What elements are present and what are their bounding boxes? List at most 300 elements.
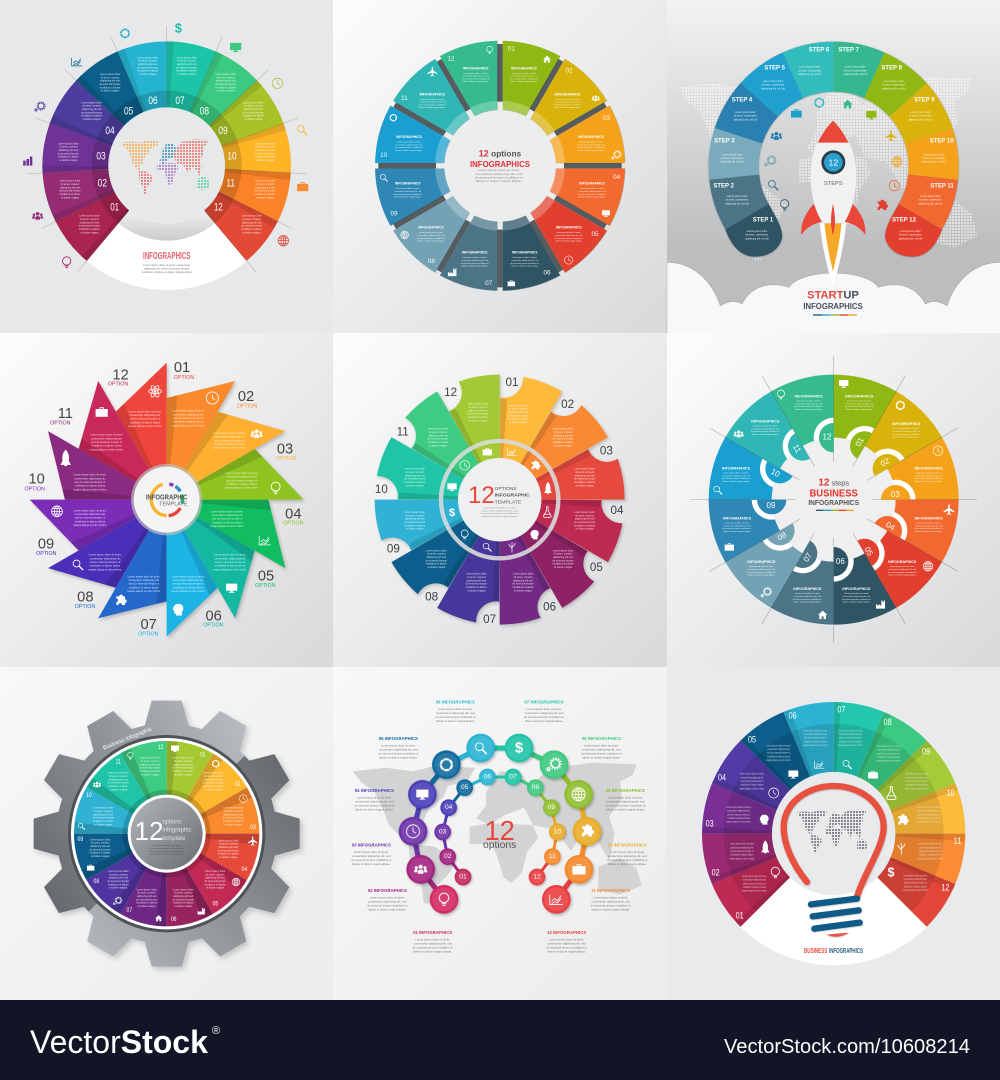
segment numbers: 12 [214, 201, 223, 213]
segment numbers: 05 [590, 561, 603, 574]
blade 05 [132, 500, 269, 618]
segment 07: INFOGRAPHICS [462, 251, 488, 255]
segment 10 [377, 437, 464, 500]
segment 08 [855, 712, 931, 800]
step 3: STEP 3 [714, 139, 735, 145]
segment numbers: 01 [110, 201, 119, 213]
segment 09 [694, 446, 834, 562]
small numbered circles: 08 [532, 784, 539, 791]
segment numbers: 03 [706, 819, 714, 829]
solid world map [353, 763, 642, 905]
numbered half bubbles: 06 [836, 557, 845, 566]
segment 09: INFOGRAPHICS [395, 182, 421, 186]
centre hub with heading [123, 790, 211, 878]
centre disc with heading: 12 [468, 482, 495, 509]
blade numbers and option labels: OPTION [174, 375, 194, 381]
numbers and icons on segments: 07 [485, 280, 493, 287]
step 2 [700, 157, 774, 229]
centre heading: 12 options [479, 148, 522, 158]
segment numbers and icons: 12 [158, 744, 164, 751]
blade numbers and option labels: OPTION [75, 604, 95, 610]
panel: gear wheel, bottom left [0, 667, 333, 1000]
step 8: STEP 8 [881, 65, 903, 71]
centre hub: INFOGRAPHIC [146, 494, 187, 501]
blade numbers and option labels: 06 [206, 608, 222, 624]
blade 11 [64, 381, 201, 500]
segment 05 [802, 500, 942, 616]
segment 07: INFOGRAPHICS [793, 587, 822, 591]
blade 08 [48, 465, 167, 602]
numbered half bubbles: 07 [802, 551, 814, 563]
step 4 [715, 80, 784, 145]
segment 12 [438, 362, 536, 468]
segment 03 [531, 438, 637, 536]
segment 09 [63, 794, 167, 880]
segment 04 [50, 77, 133, 147]
light bulb [784, 786, 884, 937]
segment numbers: 08 [425, 590, 438, 603]
text labels around chains: 06 INFOGRAPHICS [436, 699, 475, 704]
blade 09 [30, 440, 167, 559]
panel: circle with world map, top left [0, 0, 333, 333]
blade 07 [98, 500, 167, 618]
segment numbers and icons: 09 [77, 836, 83, 843]
text labels around chains: 02 INFOGRAPHICS [368, 888, 407, 893]
small numbered circles: 12 [533, 873, 541, 880]
numbers and icons on segments: 02 [565, 67, 573, 74]
segment icons [714, 380, 954, 619]
small numbered circles: 11 [549, 853, 556, 860]
text labels around chains: 11 INFOGRAPHICS [591, 888, 630, 893]
segment 11 [393, 384, 500, 482]
segment numbers: 01 [736, 911, 744, 921]
step 9 [885, 83, 961, 159]
numbers and icons on segments: 11 [401, 95, 408, 102]
centre number: options [483, 840, 516, 851]
numbered half bubbles: 11 [791, 443, 803, 455]
centre disc with heading [458, 458, 541, 541]
segment numbers: 07 [175, 95, 185, 107]
clouds with startup heading [667, 262, 1000, 333]
segment 06 [473, 210, 560, 304]
blade numbers and option labels: OPTION [255, 583, 276, 589]
segment 11 [891, 834, 965, 884]
blade numbers and option labels: 02 [238, 389, 254, 405]
blade numbers and option labels: OPTION [276, 456, 296, 462]
curved gear label: Business infographic [102, 726, 153, 752]
small numbered circles: 09 [548, 804, 555, 811]
centre disc with heading: TEMPLATE [495, 499, 522, 505]
segment numbers: 12 [941, 883, 949, 893]
text labels around chains: 03 INFOGRAPHICS [352, 842, 391, 847]
blade numbers and option labels: 05 [258, 569, 274, 585]
segment 03 [702, 783, 777, 834]
centre heading: 12 steps [818, 477, 849, 488]
panel: twelve separated segments, top centre [333, 0, 667, 333]
segment numbers and icons: 07 [126, 907, 132, 914]
segment numbers [706, 704, 962, 921]
segment 02: INFOGRAPHICS [892, 422, 921, 426]
segments with titles [362, 27, 638, 304]
segment numbers and icons: 08 [93, 878, 99, 885]
numbers and icons on segments: 01 [508, 45, 515, 52]
large icon circles [399, 734, 601, 914]
bulb caption: BUSINESS [804, 948, 828, 955]
blade numbers and option labels: 08 [77, 590, 93, 606]
gear body [34, 701, 300, 967]
step 6: STEP 6 [809, 48, 830, 54]
segment 10 [217, 123, 300, 194]
segment 04 [167, 834, 259, 880]
segment 07 [834, 702, 884, 777]
blade numbers and option labels: 01 [174, 360, 190, 376]
numbered half bubbles: 10 [769, 467, 782, 479]
segment 02 [167, 753, 253, 857]
segment numbers: 01 [506, 376, 518, 389]
segment 06 [127, 834, 213, 937]
segment numbers: 05 [748, 734, 756, 744]
segment 08 [384, 500, 482, 606]
blade icons [52, 384, 280, 616]
rocket [801, 121, 865, 287]
numbered half bubbles: 09 [767, 501, 776, 510]
segment numbers: 07 [483, 613, 496, 626]
segment 02 [527, 59, 614, 153]
small numbered circles: 10 [554, 828, 561, 835]
blade numbers and option labels: OPTION [108, 382, 128, 388]
footer watermark band: VectorStock [30, 1024, 208, 1060]
segment 04 [536, 500, 622, 562]
segment 02 [518, 393, 615, 500]
step 10 [899, 128, 968, 194]
step 2: STEP 2 [713, 184, 735, 190]
segment numbers and icons: 06 [171, 916, 177, 923]
segment numbers: 03 [600, 444, 613, 457]
numbered half bubbles: 05 [863, 545, 875, 558]
step 7 [834, 42, 884, 98]
step 9: STEP 9 [914, 97, 935, 103]
segment 02 [693, 809, 781, 884]
step 12 [885, 204, 942, 257]
segment 10 [375, 106, 450, 163]
segment numbers and icons: 05 [212, 900, 218, 907]
numbers and icons on segments: 04 [613, 174, 621, 181]
segment 04 [550, 168, 625, 226]
small numbered circles: 03 [439, 828, 447, 835]
segment numbers: 06 [543, 600, 556, 613]
blade numbers and option labels: 03 [277, 442, 293, 458]
segment numbers: 07 [837, 704, 845, 714]
segment numbers: 09 [922, 746, 930, 756]
text labels around chains: 07 INFOGRAPHICS [524, 699, 564, 704]
blade numbers and option labels: 12 [113, 367, 129, 383]
segment 01 [167, 741, 213, 834]
segment numbers: 04 [611, 504, 624, 517]
segment numbers [96, 95, 237, 213]
white bottom sector with infographics caption: INFOGRAPHICS [143, 251, 191, 262]
segment 05 [76, 45, 161, 129]
segment numbers: 04 [718, 773, 726, 783]
panel: pinwheel, middle left [0, 333, 333, 667]
step 12: STEP 12 [892, 218, 917, 224]
ring of twelve numbered segments [33, 32, 300, 265]
segment numbers: 06 [789, 711, 797, 721]
segment 05 [500, 518, 606, 615]
segment 04: INFOGRAPHICS [579, 182, 606, 186]
centre heading [470, 148, 530, 183]
segment 12: INFOGRAPHICS [463, 66, 489, 70]
outer icons [23, 21, 308, 268]
segment 04: INFOGRAPHICS [915, 516, 943, 520]
numbered half bubbles [757, 423, 910, 576]
segment 08: INFOGRAPHICS [747, 560, 776, 564]
small numbered circles [434, 769, 566, 885]
centre heading: BUSINESS [809, 488, 858, 499]
step 5: STEP 5 [764, 65, 786, 71]
step 1: STEP 1 [753, 218, 774, 224]
blade numbers and option labels: OPTION [203, 623, 224, 629]
blade 03 [167, 440, 304, 559]
segment 11 [725, 383, 865, 500]
small numbered circles: 05 [461, 784, 469, 791]
segment 09 [362, 139, 455, 226]
rocket: 12 [829, 157, 838, 167]
segment numbers: 06 [148, 95, 158, 107]
segment numbers and icons: 11 [115, 758, 121, 765]
centre hub with heading: infographic [162, 828, 192, 834]
footer watermark band: VectorStock.com/10608214 [724, 1036, 970, 1058]
segment numbers and icons: 04 [241, 866, 247, 873]
segments [693, 693, 975, 931]
step 3 [704, 123, 766, 180]
numbers and icons on segments [380, 45, 621, 287]
centre hub with heading: template [162, 836, 186, 842]
numbered half bubbles: 12 [823, 432, 832, 441]
segment 01 [503, 41, 560, 116]
segment numbers: 03 [96, 150, 106, 162]
segment 06 [780, 500, 896, 639]
segment numbers: 10 [947, 788, 955, 798]
segment 05 [143, 834, 247, 920]
blade 01 [167, 381, 235, 500]
text labels around chains [351, 699, 648, 953]
numbers and icons on segments: 08 [428, 258, 435, 265]
wedge segments [694, 360, 973, 639]
dotted world map [122, 139, 210, 194]
small numbered circles: 07 [509, 773, 517, 780]
segment numbers: 08 [200, 106, 209, 118]
centre disc with heading: INFOGRAPHIC [495, 492, 530, 498]
centre hub with heading: 12 [135, 816, 163, 846]
blade numbers and option labels: 07 [141, 617, 157, 633]
centre disc with heading: OPTIONS [495, 486, 517, 492]
segment 03 [167, 787, 270, 874]
segment 07 [440, 215, 497, 291]
segment 01 [834, 375, 896, 500]
blade 06 [107, 500, 226, 637]
segment numbers: 09 [387, 542, 400, 555]
rocket: STEPS [824, 181, 843, 187]
text labels around chains: 08 INFOGRAPHICS [582, 736, 621, 741]
segment numbers: 11 [226, 177, 235, 189]
segment 04 [712, 737, 800, 812]
segment 02 [834, 391, 950, 531]
segment 01: INFOGRAPHICS [845, 394, 874, 398]
segment 10: INFOGRAPHICS [722, 466, 751, 470]
panel: two chains of circles on world map, bottom centre [333, 667, 667, 1000]
segment 09 [874, 741, 962, 829]
segment 02: INFOGRAPHICS [555, 92, 581, 96]
numbers and icons on segments: 09 [390, 210, 398, 217]
panel: startup rocket arch, top right [667, 0, 1000, 333]
segment numbers: 10 [375, 483, 388, 496]
numbers and icons on segments: 06 [543, 269, 551, 276]
panel: light bulb wheel, bottom right [667, 667, 1000, 1000]
segment 09: INFOGRAPHICS [723, 516, 752, 520]
segment 05: INFOGRAPHICS [556, 226, 582, 230]
segment 12 [867, 855, 955, 931]
blade 04 [167, 500, 285, 568]
segment 08 [717, 468, 834, 608]
segment numbers: 02 [712, 868, 720, 878]
centre hub: TEMPLATE [159, 501, 188, 507]
segment 05 [513, 193, 607, 280]
segment 03: INFOGRAPHICS [578, 135, 605, 139]
numbered half bubbles: 01 [854, 435, 866, 448]
segment numbers: 08 [884, 717, 892, 727]
segment 12 [192, 190, 278, 265]
segment 01 [500, 377, 562, 464]
numbers and icons on segments: 03 [603, 115, 611, 122]
step 4: STEP 4 [732, 97, 753, 103]
notched segments [362, 362, 637, 637]
segment numbers and icons: 01 [200, 751, 206, 758]
step 6 [783, 32, 852, 104]
white bottom sector [741, 834, 927, 965]
step 10: STEP 10 [930, 139, 954, 145]
segment numbers and icons [77, 744, 257, 923]
numbers and icons on segments: 12 [447, 55, 455, 62]
centre heading [808, 477, 859, 510]
numbers and icons on segments: 10 [380, 152, 388, 159]
numbered half bubbles: 04 [884, 520, 897, 533]
segment 08 [385, 179, 473, 272]
step 5 [741, 45, 817, 121]
white bottom sector with infographics caption: incididunt ut labore et dolore magna aliqua [142, 270, 192, 274]
dotted map inside bulb [797, 810, 868, 854]
numbered half bubbles: 02 [879, 456, 892, 468]
segment 07 [437, 536, 500, 622]
text labels around chains: 01 INFOGRAPHICS [413, 930, 452, 935]
numbered half bubbles: 08 [776, 530, 789, 542]
segment 11 [217, 169, 291, 222]
segment 06 [117, 32, 191, 116]
panel: notched wheel, middle centre [333, 333, 667, 667]
pinwheel blades [30, 363, 304, 637]
segment numbers: 04 [105, 125, 115, 137]
outer connectors [413, 748, 587, 899]
segment 10: INFOGRAPHICS [396, 135, 423, 139]
segment numbers: 02 [561, 398, 574, 411]
segment numbers and icons: 03 [250, 824, 256, 831]
step 1 [725, 204, 782, 257]
small numbered circles: 01 [459, 873, 467, 880]
blade numbers and option labels: OPTION [283, 521, 304, 527]
segment 06 [783, 693, 858, 781]
segment 03: INFOGRAPHICS [915, 466, 943, 470]
ring icons [447, 448, 552, 552]
text labels around chains: 10 INFOGRAPHICS [608, 842, 647, 847]
segment numbers and icons: 10 [86, 792, 92, 799]
blade numbers and option labels: 10 [29, 472, 45, 488]
segment 01 [705, 838, 793, 927]
footer watermark band [0, 1000, 1000, 1080]
segment 12: INFOGRAPHICS [795, 394, 823, 398]
segment 06: INFOGRAPHICS [842, 587, 871, 591]
inner icons [765, 98, 902, 210]
segment 08 [188, 51, 261, 136]
centre heading: INFOGRAPHICS [470, 159, 530, 169]
segment 01 [49, 175, 132, 261]
blade numbers and option labels: 09 [38, 537, 54, 553]
segment numbers and icons: 02 [235, 781, 241, 788]
segment 10 [886, 783, 975, 858]
bulb caption: INFOGRAPHICS [829, 948, 863, 955]
segment 10 [74, 787, 167, 834]
segment 11: INFOGRAPHICS [420, 92, 446, 96]
segment 11 [393, 51, 487, 138]
inner connectors [443, 777, 557, 877]
blade numbers and option labels: OPTION [237, 403, 257, 409]
white bottom sector with infographics caption: Lorem ipsum dolor sit amet, consectetur [143, 263, 190, 267]
segment numbers: 12 [444, 386, 457, 399]
white bottom sector with infographics caption [87, 210, 247, 290]
blade numbers and option labels [24, 360, 304, 637]
step 11: STEP 11 [930, 184, 954, 190]
segment 12 [120, 730, 207, 834]
small numbered circles: 06 [484, 773, 491, 780]
blade numbers and option labels: 04 [285, 506, 301, 522]
arch of twelve steps [700, 32, 968, 257]
centre heading: INFOGRAPHICS [808, 500, 859, 507]
segment numbers: 10 [227, 150, 237, 162]
segment 10 [709, 437, 834, 500]
text labels around chains: 09 INFOGRAPHICS [606, 788, 645, 793]
segment numbers: 11 [954, 836, 962, 846]
segment 02 [33, 146, 119, 221]
segment 12 [440, 27, 527, 121]
segment 12 [771, 360, 888, 500]
segment 08: INFOGRAPHICS [418, 226, 445, 230]
blade numbers and option labels: OPTION [24, 486, 45, 492]
dotted world map background [679, 76, 977, 261]
clouds with startup heading: STARTUP [807, 290, 859, 302]
segment numbers [375, 376, 624, 626]
blade numbers and option labels: OPTION [36, 551, 57, 557]
clouds with startup heading: INFOGRAPHICS [803, 302, 863, 311]
segment 05 [741, 705, 829, 793]
text labels around chains: 04 INFOGRAPHICS [355, 788, 394, 793]
segment numbers: 11 [397, 425, 409, 438]
panel: business wheel with spikes, middle right [667, 333, 1000, 667]
segment 06: INFOGRAPHICS [512, 251, 538, 255]
segment 03 [40, 120, 113, 173]
centre hub [131, 464, 202, 535]
segment 01: INFOGRAPHICS [511, 66, 538, 70]
segment numbers: 05 [124, 106, 133, 118]
small numbered circles: 04 [445, 804, 453, 811]
blade 10 [48, 431, 167, 500]
